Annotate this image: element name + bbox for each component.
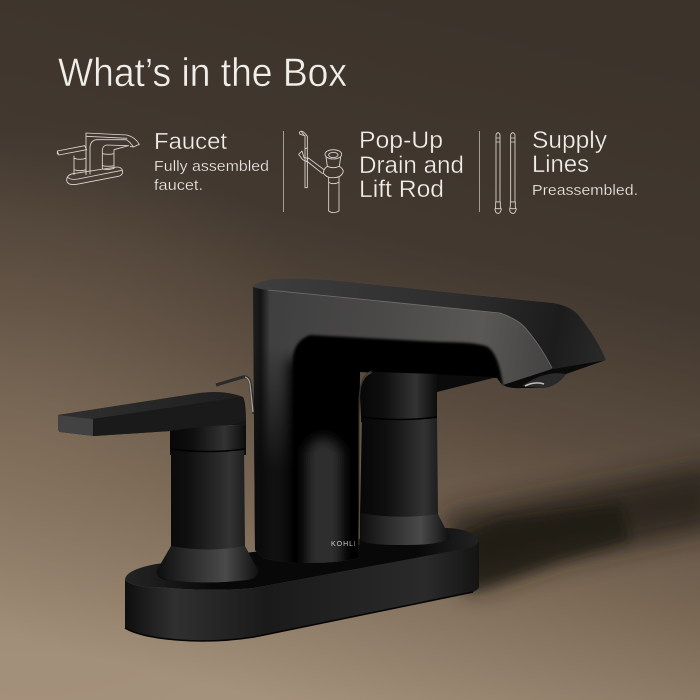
description: supply lines: Preassembled. <box>532 182 638 199</box>
title: What’s in the Box <box>58 51 347 95</box>
heading: Pop-Up Drain and Lift Rod: Pop-Up <box>359 127 443 154</box>
icon: drain and lift rod <box>299 131 343 213</box>
description: faucet: faucet. <box>154 177 203 194</box>
heading: Pop-Up Drain and Lift Rod: Lift Rod <box>359 176 444 203</box>
item: supply lines <box>495 127 638 213</box>
front left handle <box>58 392 258 582</box>
lift rod <box>216 377 254 414</box>
item: faucet <box>57 128 269 194</box>
lever <box>58 392 246 436</box>
item: pop-up drain <box>299 127 464 213</box>
heading: Supply Lines: Lines <box>532 151 589 178</box>
icon: supply lines <box>495 133 516 213</box>
heading: Pop-Up Drain and Lift Rod: Drain and <box>359 152 464 179</box>
column highlight <box>306 438 342 575</box>
cast shadow of faucet <box>440 462 700 592</box>
main spout and column <box>253 275 613 575</box>
spout front face <box>254 287 552 563</box>
divider right <box>479 131 480 212</box>
deck plate <box>125 528 479 641</box>
heading: Faucet: Faucet <box>154 128 227 154</box>
back right handle <box>359 371 497 545</box>
KOHLER logo: KOHLER <box>331 541 366 548</box>
icon: faucet line drawing <box>57 133 139 185</box>
description: faucet: Fully assembled <box>154 158 269 175</box>
product: matte black faucet <box>58 275 613 641</box>
divider left <box>283 131 284 212</box>
spout top and tip <box>253 279 606 369</box>
aerator <box>503 360 606 388</box>
heading: Supply Lines: Supply <box>532 127 608 154</box>
arch underside <box>293 335 503 565</box>
